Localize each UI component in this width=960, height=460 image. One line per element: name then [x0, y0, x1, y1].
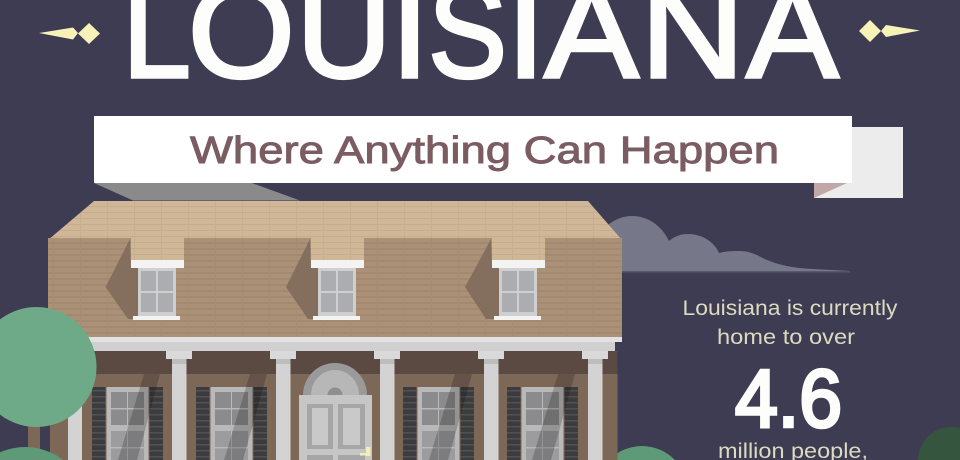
porch window 4 [507, 387, 578, 460]
tree: left [0, 307, 97, 460]
intro line 1: Louisiana is currently [682, 296, 898, 320]
intro line 2: home to over [717, 325, 855, 349]
porch wall [50, 374, 618, 460]
ribbon shadow on roof [94, 183, 300, 200]
porch window 1 [92, 387, 163, 460]
population text [682, 296, 898, 460]
column 1 [166, 351, 192, 460]
bush: dark green right [918, 427, 960, 460]
bush: bottom left [0, 447, 63, 460]
door [299, 395, 372, 460]
ribbon banner [94, 116, 903, 200]
porch window 3 [403, 387, 474, 460]
cornice [68, 337, 622, 351]
column 3 [374, 351, 400, 460]
porch ceiling band [67, 351, 618, 374]
bush: right of house [609, 446, 675, 460]
upper roof [48, 201, 622, 240]
cloud [608, 216, 850, 272]
porch window 2 [196, 387, 267, 460]
ribbon fold shadow [814, 183, 847, 198]
ribbon front [94, 116, 852, 183]
door handle [360, 447, 370, 456]
dormer: left [106, 238, 184, 320]
column 5 [582, 351, 608, 460]
column 4 [478, 351, 504, 460]
house [48, 201, 622, 460]
subtitle: Where Anything Can Happen [190, 130, 779, 172]
population number: 4.6 [735, 354, 842, 444]
ribbon back fold [814, 127, 903, 198]
column shadows [118, 374, 575, 460]
dormer: centre [286, 238, 364, 320]
fanlight [303, 363, 367, 395]
ornament: left star [39, 23, 100, 44]
lower roof [48, 238, 622, 338]
ornament: right star [859, 20, 920, 42]
dormer: right [465, 238, 545, 320]
column 2 [270, 351, 296, 460]
column 0 [68, 351, 82, 460]
